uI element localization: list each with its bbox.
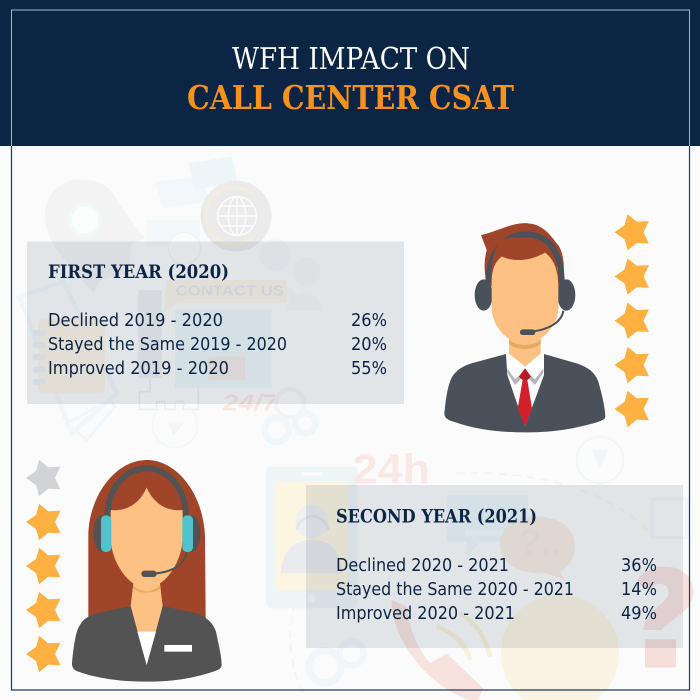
heading: second year: SECOND YEAR (2021) [336,506,537,528]
row: declined [48,311,387,331]
header band [0,0,700,146]
background icons: upper left cluster [19,157,322,448]
icon: female agent [72,460,222,682]
row: improved [336,604,657,624]
background icons: lower right cluster: ?.. [518,522,561,563]
row: declined: Declined 2019 - 2020 [48,311,223,331]
row: improved: Improved 2020 - 2021 [336,604,515,624]
row: improved: 55% [351,359,387,379]
background icons: lower right cluster: 24h [353,445,430,492]
row: declined: 36% [621,556,657,576]
row: stayed the same: 14% [621,580,657,600]
title line 2: CALL CENTER CSAT [187,78,514,117]
row: declined: Declined 2020 - 2021 [336,556,509,576]
title line 1: WFH IMPACT ON [232,42,470,77]
panel: second year [306,485,683,648]
star rating: male agent [614,214,649,427]
row: declined [336,556,657,576]
row: improved [48,359,387,379]
star rating: female agent [26,460,60,672]
row: stayed the same: Stayed the Same 2020 - 2021 [336,580,574,600]
title [187,42,514,117]
row: declined: 26% [351,311,387,331]
row: stayed the same: 20% [351,335,387,355]
row: improved: 49% [621,604,657,624]
background icons: upper left cluster: CONTACT US [176,283,284,299]
background icons: lower right cluster [266,437,693,700]
row: improved: Improved 2019 - 2020 [48,359,229,379]
heading: first year: FIRST YEAR (2020) [48,261,229,283]
icon: male agent [444,223,605,432]
row: stayed the same: Stayed the Same 2019 - 2020 [48,335,287,355]
background icons: upper left cluster: 24/7 [221,390,279,416]
panel: first year [27,242,404,404]
